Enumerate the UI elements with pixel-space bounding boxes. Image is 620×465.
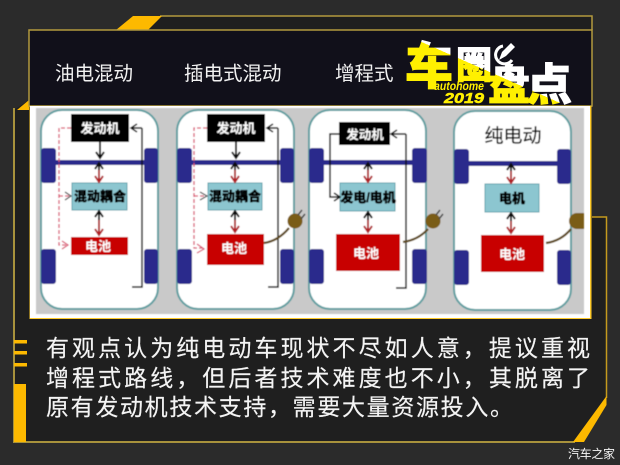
- car 2: 插电式混动: 混动耦合: [209, 189, 261, 204]
- heading: 插电式混动: 插电式混动: [184, 63, 282, 85]
- logo: 车圈盘点 autohome 2019: 盘: [488, 62, 530, 109]
- car 1: 油电混动: 混动耦合: [74, 189, 126, 204]
- icon: plug: [264, 210, 305, 243]
- car 2: 插电式混动: [177, 110, 305, 309]
- car 4: 纯电动: 电机: [499, 191, 525, 206]
- watermark: 汽车之家: [568, 446, 615, 461]
- logo: 车圈盘点 autohome 2019: autohome: [434, 81, 485, 93]
- body text: 原有发动机技术支持，需要大量资源投入。: [46, 394, 513, 420]
- logo: 车圈盘点 autohome 2019: 车: [405, 39, 453, 95]
- logo: 车圈盘点 autohome 2019: [405, 39, 572, 110]
- body text: 有观点认为纯电动车现状不尽如人意，提议重视: [46, 335, 590, 361]
- header band: [29, 30, 592, 106]
- car 2: 插电式混动: 电池: [221, 241, 247, 256]
- car 4: 纯电动: [454, 111, 584, 310]
- icon: plug: [403, 210, 443, 242]
- car 1: 油电混动: [41, 110, 158, 309]
- heading: 油电混动: 油电混动: [55, 63, 133, 85]
- car 1: 油电混动: 发动机: [80, 121, 120, 136]
- car 4: 纯电动: 纯电动: [484, 125, 542, 147]
- body text: 增程式路线，但后者技术难度也不小，其脱离了: [46, 365, 590, 391]
- body text: [46, 335, 590, 420]
- icon: pencil badge: [496, 43, 515, 64]
- diagram panel: [30, 106, 592, 319]
- heading: 增程式: 增程式: [335, 63, 394, 85]
- car 3: 增程式: 电池: [353, 246, 379, 261]
- logo: 车圈盘点 autohome 2019: 2019: [443, 90, 485, 107]
- icon: plug: [546, 213, 584, 243]
- logo: 车圈盘点 autohome 2019: 点: [526, 61, 572, 110]
- car 1: 油电混动: 电池: [85, 239, 111, 254]
- car 3: 增程式: 发电/电机: [340, 190, 396, 205]
- car 3: 增程式: [309, 110, 443, 309]
- logo: 车圈盘点 autohome 2019: 圈: [456, 45, 492, 86]
- car 3: 增程式: 发动机: [346, 127, 384, 142]
- car 2: 插电式混动: 发动机: [216, 121, 256, 136]
- car 4: 纯电动: 电池: [499, 247, 525, 262]
